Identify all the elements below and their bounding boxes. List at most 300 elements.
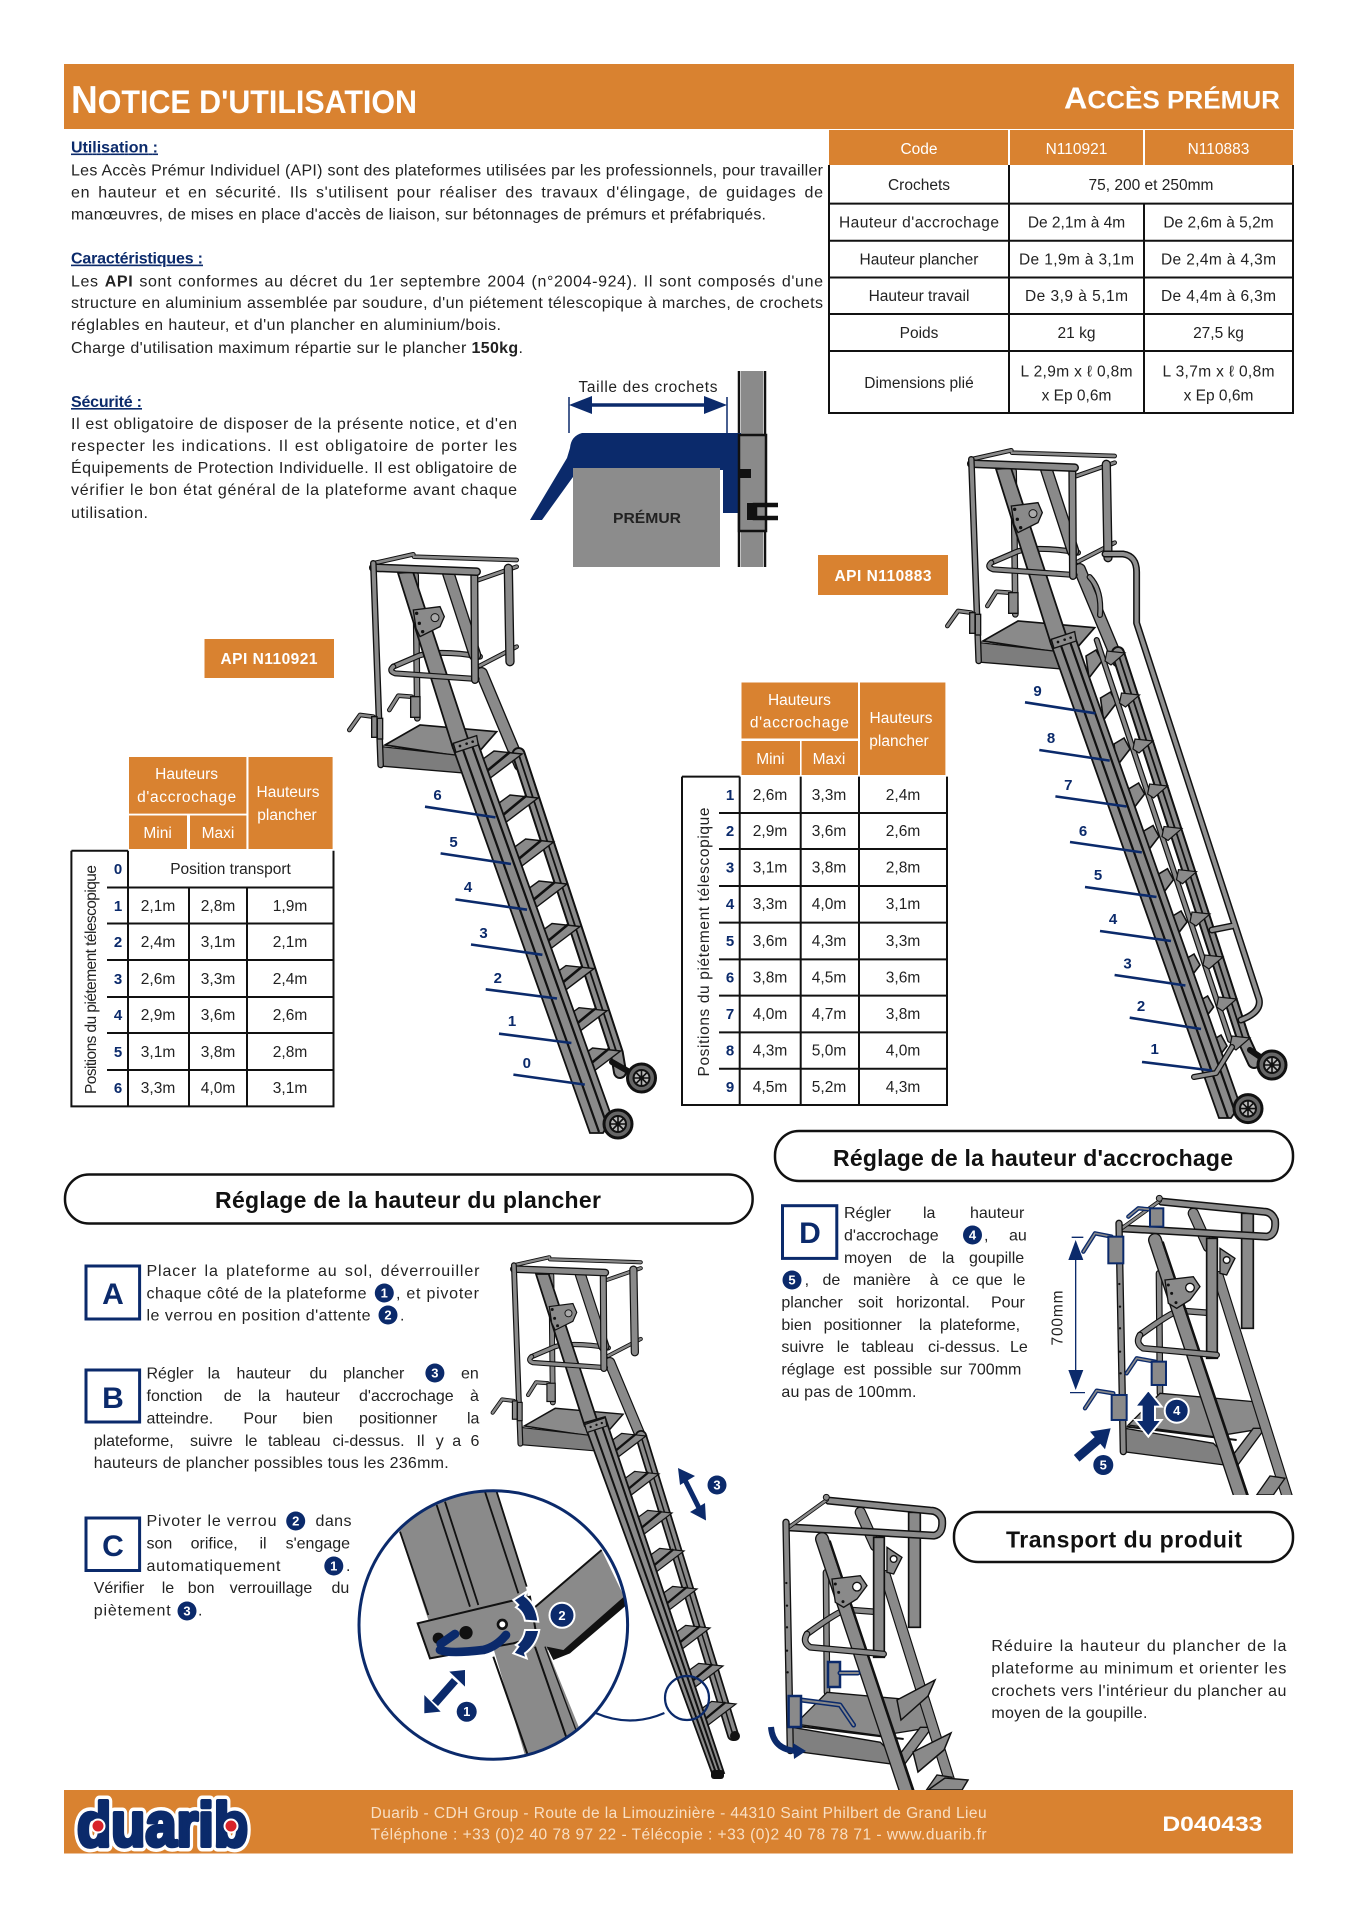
table: positions N110883: 3,6m — [812, 823, 846, 840]
step D: que — [976, 1272, 1003, 1289]
step D: de — [822, 1272, 840, 1289]
step B: atteindre. — [146, 1411, 213, 1428]
position markers: 5 — [1094, 867, 1102, 884]
step B: le — [245, 1433, 258, 1450]
step D: la — [942, 1250, 955, 1267]
table: positions N110883: 2,4m — [886, 787, 920, 804]
step C: orifice, — [191, 1536, 238, 1553]
marker 1 — [457, 1702, 477, 1722]
step B: en — [461, 1366, 479, 1383]
specification table: De 2,1m à 4m — [1028, 214, 1125, 232]
step D: d'accrochage — [844, 1228, 939, 1244]
table: positions N110921: 3,1m — [273, 1080, 307, 1097]
specification table: Crochets — [888, 177, 950, 194]
specification table: Hauteur plancher — [860, 252, 978, 268]
table: positions N110883: 2,9m — [753, 823, 787, 840]
table: positions N110883: 3,1m — [753, 860, 787, 876]
step D: , — [805, 1272, 809, 1289]
step C: du — [332, 1580, 349, 1597]
position markers — [1025, 683, 1212, 1070]
document code: D040433 — [1162, 1813, 1262, 1836]
position markers: 2 — [1137, 998, 1145, 1015]
table: positions N110883: 3,3m — [753, 896, 787, 913]
table: positions N110921: 6 — [114, 1080, 122, 1097]
marker 5 — [782, 1270, 802, 1290]
step D: positionner — [824, 1317, 903, 1334]
marker 1 — [324, 1556, 343, 1576]
handrail — [1105, 554, 1259, 1020]
table: positions N110883: 5,2m — [812, 1079, 846, 1096]
step B: a — [452, 1433, 461, 1450]
step C: le — [162, 1580, 174, 1597]
table: positions N110883: 4,0m — [886, 1042, 920, 1060]
step D: suivre — [781, 1339, 824, 1356]
specification table: N110921 — [1046, 141, 1107, 158]
letter box A: A — [102, 1278, 124, 1311]
table: positions N110883: 2,8m — [886, 860, 920, 876]
step D: Régler — [844, 1205, 892, 1222]
marker 1: 1 — [330, 1558, 337, 1574]
marker 2: 2 — [292, 1514, 299, 1528]
position markers: 8 — [1047, 730, 1055, 747]
table: positions N110921: d'accrochage — [137, 789, 236, 806]
step B: Régler — [146, 1366, 194, 1383]
rotation arrow — [771, 1727, 806, 1759]
magnifier outline — [359, 1491, 628, 1759]
heading: reglage plancher — [65, 1174, 753, 1224]
label 700mm: 700mm — [1050, 1290, 1067, 1346]
transport text: Réduire la hauteur du plancher de la — [991, 1638, 1286, 1655]
step A: Placer la plateforme au sol, déverrouiller — [146, 1263, 480, 1280]
text block: securite: Sécurité : — [71, 394, 142, 411]
table: positions N110921: 3,1m — [141, 1044, 175, 1061]
specification table: Poids — [900, 325, 939, 342]
text block: caracteristiques: Les API sont conformes au décret du 1er septembre 2004 (n°2004-924). Il sont composés d'une — [71, 273, 823, 290]
marker 4: 4 — [969, 1228, 977, 1242]
blue hook — [530, 433, 741, 520]
dimension 700mm — [1068, 1237, 1085, 1393]
arrow 4 — [1135, 1390, 1162, 1437]
table: positions N110883: 6 — [726, 970, 734, 986]
step B: la — [258, 1388, 271, 1405]
step B: d'accrochage — [359, 1388, 454, 1405]
address — [371, 1805, 987, 1844]
step B: ci-dessus. — [332, 1433, 405, 1450]
illustration: reglage accrochage — [1050, 1195, 1288, 1500]
table: positions N110883: 9 — [726, 1079, 734, 1096]
table: positions N110921: 4,0m — [201, 1080, 235, 1097]
table: positions N110883: 3,8m — [886, 1006, 920, 1023]
premur block: PRÉMUR — [613, 510, 681, 527]
letter box B: B — [102, 1382, 124, 1415]
letter box D: D — [799, 1217, 821, 1250]
step B: plancher — [343, 1366, 405, 1383]
table: positions N110883: 4,0m — [812, 896, 846, 913]
step D: ce — [952, 1272, 969, 1289]
step D: ci-dessus. — [928, 1339, 1000, 1356]
text block: utilisation — [71, 140, 824, 224]
table: positions N110883: 3,6m — [886, 970, 920, 986]
illustration: transport — [771, 1494, 968, 1799]
position markers: 6 — [433, 787, 442, 804]
position markers: 3 — [1123, 956, 1132, 973]
specification table: Hauteur d'accrochage — [839, 214, 999, 232]
table: positions N110921: 1,9m — [273, 898, 307, 915]
marker 5: 5 — [1100, 1458, 1107, 1472]
specification table: De 2,4m à 4,3m — [1161, 252, 1276, 268]
table: positions N110883: 7 — [726, 1006, 734, 1023]
step A: . — [400, 1308, 404, 1324]
step C: automatiquement — [146, 1558, 281, 1575]
arrow 1 — [424, 1670, 465, 1713]
table: positions N110921 — [71, 757, 334, 1106]
marker 1 — [375, 1284, 394, 1302]
position markers: 4 — [464, 879, 473, 896]
table: positions N110883: 4,5m — [812, 970, 846, 986]
step D: , — [984, 1228, 988, 1244]
heading: transport: Transport du produit — [1006, 1527, 1242, 1553]
table: positions N110921: Position transport — [170, 861, 291, 878]
step C — [86, 1512, 352, 1620]
table: positions N110921: plancher — [257, 807, 317, 824]
text block: caracteristiques: réglables en hauteur, et d'un plancher en aluminium/bois. — [71, 317, 501, 334]
step D: le — [1013, 1272, 1026, 1289]
step D: au — [1009, 1228, 1027, 1244]
text block: securite: Équipements de Protection Individuelle. Il est obligatoire de — [71, 458, 517, 477]
step B: y — [436, 1433, 444, 1450]
position markers: 1 — [1151, 1041, 1159, 1058]
table: positions N110921: 3,3m — [201, 971, 235, 988]
table: positions N110921: Positions du piétement télescopique — [83, 865, 100, 1094]
table: positions N110883: 2,6m — [886, 823, 920, 840]
table: positions N110883: 3,3m — [812, 787, 846, 804]
diagram: taille des crochets — [530, 371, 778, 567]
specification table: Dimensions plié — [864, 375, 974, 392]
table: positions N110883: 4,7m — [812, 1006, 846, 1023]
table: positions N110883: 4,3m — [812, 933, 846, 950]
logo: duarib — [77, 1791, 248, 1860]
step D: le — [837, 1339, 849, 1356]
table: positions N110921: Mini — [143, 825, 172, 842]
step D: bien — [781, 1317, 812, 1334]
table: positions N110883: 1 — [726, 787, 734, 804]
dimension label: Taille des crochets — [578, 379, 718, 396]
step D: moyen — [844, 1250, 892, 1267]
step C: . — [346, 1558, 350, 1575]
table: positions N110883: 4 — [726, 896, 735, 913]
address: Téléphone : +33 (0)2 40 78 97 22 - Télécopie : +33 (0)2 40 78 78 71 - www.duarib.fr — [371, 1826, 987, 1844]
table: positions N110921: 4 — [114, 1007, 123, 1024]
table: positions N110921: 3,3m — [141, 1080, 175, 1097]
text block: utilisation: Les Accès Prémur Individuel (API) sont des plateformes utilisées par les professionnels, pour travailler — [71, 163, 824, 180]
table: positions N110921: 3 — [114, 971, 122, 988]
step B: la — [467, 1411, 480, 1428]
table: positions N110921: 2,1m — [141, 898, 175, 915]
specification table: 75, 200 et 250mm — [1089, 177, 1213, 194]
step C: s'engage — [286, 1536, 350, 1553]
table: positions N110883: 8 — [726, 1042, 734, 1060]
step C: verrouillage — [230, 1580, 312, 1597]
position markers: 2 — [494, 970, 502, 987]
heading: reglage accrochage — [775, 1131, 1293, 1181]
specification table: De 2,6m à 5,2m — [1163, 214, 1274, 232]
table: positions N110883 — [682, 682, 947, 1105]
rotation arrows — [513, 1592, 539, 1658]
position markers: 5 — [449, 834, 458, 851]
step D: au pas de 100mm. — [781, 1384, 916, 1401]
step A: chaque côté de la plateforme — [146, 1286, 367, 1303]
premur block — [573, 468, 720, 567]
table: positions N110883: 4,0m — [753, 1006, 787, 1023]
step B: de — [224, 1388, 242, 1405]
step D: tableau — [861, 1339, 914, 1356]
table: positions N110921: 2,8m — [273, 1044, 307, 1061]
step B: tableau — [268, 1433, 320, 1450]
step D — [781, 1205, 1028, 1401]
table: positions N110921: 2,6m — [141, 971, 175, 988]
text block: securite — [71, 394, 517, 522]
step B: du — [310, 1366, 327, 1383]
step D: hauteur — [970, 1205, 1025, 1222]
heading: transport — [954, 1512, 1293, 1562]
step B: à — [470, 1388, 479, 1405]
marker 5 — [1093, 1455, 1113, 1475]
transport text — [991, 1638, 1286, 1722]
specification table: x Ep 0,6m — [1184, 388, 1253, 404]
table: positions N110883: 3,3m — [886, 933, 920, 950]
step D: de — [909, 1250, 927, 1267]
table: positions N110883: 3 — [726, 860, 734, 876]
table: positions N110921: 2,9m — [141, 1007, 175, 1024]
step B: plateforme, — [94, 1433, 174, 1450]
step D: manière — [853, 1272, 911, 1289]
heading: reglage plancher: Réglage de la hauteur du plancher — [215, 1187, 601, 1213]
marker 2 — [378, 1306, 398, 1324]
table: positions N110883: 3,8m — [753, 970, 787, 986]
step C: Pivoter le verrou — [146, 1513, 276, 1530]
table: positions N110883: 5,0m — [812, 1042, 846, 1060]
step D: à — [930, 1272, 939, 1289]
step D: 700mm — [968, 1362, 1021, 1378]
specification table: 27,5 kg — [1193, 325, 1244, 342]
letter box A — [86, 1266, 140, 1319]
marker 3 — [178, 1602, 196, 1620]
specification table: De 1,9m à 3,1m — [1019, 252, 1134, 268]
specification table: De 3,9 à 5,1m — [1025, 288, 1128, 305]
table: positions N110883: 3,1m — [886, 896, 920, 913]
marker 4 — [1165, 1399, 1189, 1423]
step B: fonction — [146, 1388, 203, 1405]
step B: positionner — [359, 1411, 438, 1428]
step D: est — [844, 1362, 865, 1378]
table: positions N110883: Hauteurs — [768, 692, 831, 709]
extra steps — [897, 1680, 968, 1790]
text block: utilisation: en hauteur et en sécurité. Ils s'utilisent pour réaliser des travaux d'élingage, de guidages de — [71, 184, 823, 202]
step A: le verrou en position d'attente — [146, 1308, 371, 1324]
table: positions N110883: 5 — [726, 933, 734, 950]
marker 4: 4 — [1173, 1403, 1181, 1418]
table: positions N110921: 5 — [114, 1044, 122, 1061]
table: positions N110883: Hauteurs — [870, 710, 933, 727]
detail magnifier — [359, 1480, 709, 1767]
specification table: Hauteur travail — [869, 288, 969, 305]
heading: reglage accrochage: Réglage de la hauteur d'accrochage — [833, 1145, 1233, 1171]
step D: possible — [874, 1362, 932, 1378]
arrow 3 — [678, 1468, 706, 1520]
footer — [64, 1790, 1293, 1860]
blue folded hooks — [789, 1662, 858, 1727]
specification table: Code — [900, 141, 938, 158]
step D: plateforme, — [940, 1317, 1020, 1334]
text block: caracteristiques: structure en aluminium assemblée par soudure, d'un piétement télescopique à marches, de crochets — [71, 295, 823, 312]
text block: utilisation: Utilisation : — [71, 140, 158, 156]
letter box C — [86, 1518, 140, 1570]
title: NOTICE D'UTILISATION — [71, 79, 417, 122]
step C: son — [146, 1536, 172, 1553]
step B — [86, 1364, 480, 1472]
table: positions N110921: Maxi — [202, 825, 234, 842]
specification table: x Ep 0,6m — [1042, 388, 1111, 404]
step B: bien — [303, 1411, 333, 1428]
position markers: 6 — [1079, 823, 1087, 840]
marker 3: 3 — [431, 1366, 439, 1380]
table: positions N110883: plancher — [869, 733, 929, 750]
table: positions N110883: 3,6m — [753, 933, 787, 950]
table: positions N110883: 2 — [726, 823, 734, 840]
step B: hauteur — [236, 1366, 291, 1383]
position markers: 3 — [479, 925, 488, 942]
step B: la — [208, 1366, 220, 1383]
marker 2 — [550, 1603, 574, 1628]
step C: . — [198, 1603, 202, 1620]
dimension arrow — [569, 396, 727, 433]
marker 2: 2 — [384, 1308, 392, 1322]
step B: Il — [416, 1433, 424, 1450]
step D: plancher — [781, 1294, 843, 1312]
marker 3: 3 — [183, 1604, 191, 1618]
step C: piètement — [94, 1603, 171, 1620]
table: positions N110883: Mini — [756, 751, 785, 768]
specification table — [829, 130, 1293, 413]
specification table: L 2,9m x ℓ 0,8m — [1020, 364, 1132, 380]
header banner — [64, 64, 1294, 129]
step D: soit — [858, 1294, 883, 1312]
step C: dans — [316, 1513, 352, 1530]
text block: securite: respecter les indications. Il est obligatoire de porter les — [71, 438, 517, 455]
position markers: 7 — [1064, 777, 1072, 794]
step B: hauteur — [286, 1388, 341, 1405]
position markers: 0 — [523, 1055, 531, 1072]
transport text: crochets vers l'intérieur du plancher au — [991, 1683, 1286, 1700]
step D: la — [923, 1205, 936, 1222]
table: positions N110921: 2 — [114, 934, 122, 951]
table: positions N110883: Positions du piétement télescopique — [696, 808, 713, 1076]
table: positions N110883: d'accrochage — [750, 714, 849, 732]
marker 3 — [425, 1364, 444, 1382]
marker 5: 5 — [788, 1272, 796, 1288]
text block: securite: utilisation. — [71, 505, 148, 522]
text block: caracteristiques — [71, 251, 823, 357]
step D: sur — [940, 1362, 963, 1378]
step B: Pour — [243, 1411, 278, 1428]
illustration: ladder plancher — [493, 1257, 740, 1779]
marker 1: 1 — [381, 1286, 388, 1300]
illustration: ladder N110883 — [947, 450, 1286, 1123]
table: positions N110921: 3,8m — [201, 1044, 235, 1061]
table: positions N110883: 2,6m — [753, 787, 787, 804]
product name: ACCÈS PRÉMUR — [1064, 80, 1280, 116]
table: positions N110921: 3,6m — [201, 1007, 235, 1024]
step C: il — [260, 1536, 267, 1553]
table: positions N110921: 2,4m — [273, 971, 307, 988]
position markers: 9 — [1033, 683, 1042, 700]
table: positions N110921: 1 — [114, 898, 122, 915]
specification table: De 4,4m à 6,3m — [1161, 288, 1276, 305]
table: positions N110921: Hauteurs — [257, 784, 320, 801]
step A: , et pivoter — [396, 1286, 480, 1303]
letter box D — [782, 1206, 837, 1258]
table: positions N110921: 2,4m — [141, 934, 175, 951]
marker 2: 2 — [558, 1608, 566, 1623]
marker 1: 1 — [463, 1704, 470, 1719]
position markers: 4 — [1109, 911, 1118, 928]
step D: goupille — [969, 1250, 1024, 1267]
step D: réglage — [781, 1362, 835, 1378]
marker 2 — [286, 1512, 305, 1530]
step D: horizontal. — [896, 1294, 970, 1312]
letter box B — [86, 1370, 140, 1422]
table: positions N110883: 4,3m — [753, 1042, 787, 1060]
table: positions N110921: 2,1m — [273, 934, 307, 951]
logo: duarib — [77, 1791, 248, 1860]
label: API N110883 — [818, 555, 948, 595]
illustration: ladder N110921 — [349, 554, 656, 1138]
text block: caracteristiques: Charge d'utilisation maximum répartie sur le plancher 150kg. — [71, 340, 523, 357]
marker 3: 3 — [713, 1478, 721, 1492]
step C: Vérifier — [94, 1580, 145, 1597]
transport text: moyen de la goupille. — [991, 1705, 1147, 1722]
marker 3 — [708, 1476, 726, 1494]
table: positions N110883: 4,5m — [753, 1079, 787, 1096]
table: positions N110921: 2,6m — [273, 1007, 307, 1024]
address: Duarib - CDH Group - Route de la Limouzinière - 44310 Saint Philbert de Grand Lieu — [371, 1805, 987, 1822]
arrow 5 — [1077, 1428, 1111, 1458]
step B: hauteurs de plancher possibles tous les 236mm. — [94, 1455, 449, 1472]
step D: Pour — [991, 1294, 1025, 1312]
transport text: plateforme au minimum et orienter les — [991, 1661, 1286, 1678]
bracket plate — [739, 435, 766, 531]
table: positions N110921: 2,8m — [201, 898, 235, 915]
label: API N110921 — [204, 639, 334, 678]
step D: la — [919, 1317, 932, 1334]
label: API N110921: API N110921 — [220, 651, 318, 668]
text block: utilisation: manœuvres, de mises en place d'accès de liaison, sur bétonnages de prémurs et préfabriqués. — [71, 207, 766, 224]
text block: caracteristiques: Caractéristiques : — [71, 251, 203, 268]
step D: Le — [1010, 1339, 1028, 1356]
letter box C: C — [102, 1530, 124, 1563]
specification table: N110883 — [1188, 141, 1249, 158]
table: positions N110921: Hauteurs — [155, 766, 218, 783]
position markers: 1 — [508, 1013, 516, 1030]
table: positions N110883: Maxi — [813, 751, 845, 768]
table: positions N110883: 3,8m — [812, 860, 846, 876]
step B: suivre — [190, 1433, 233, 1450]
step B: 6 — [470, 1433, 480, 1450]
label: API N110883: API N110883 — [834, 568, 932, 585]
table: positions N110921: 3,1m — [201, 934, 235, 951]
marker 4 — [963, 1226, 982, 1244]
position markers — [425, 787, 585, 1085]
